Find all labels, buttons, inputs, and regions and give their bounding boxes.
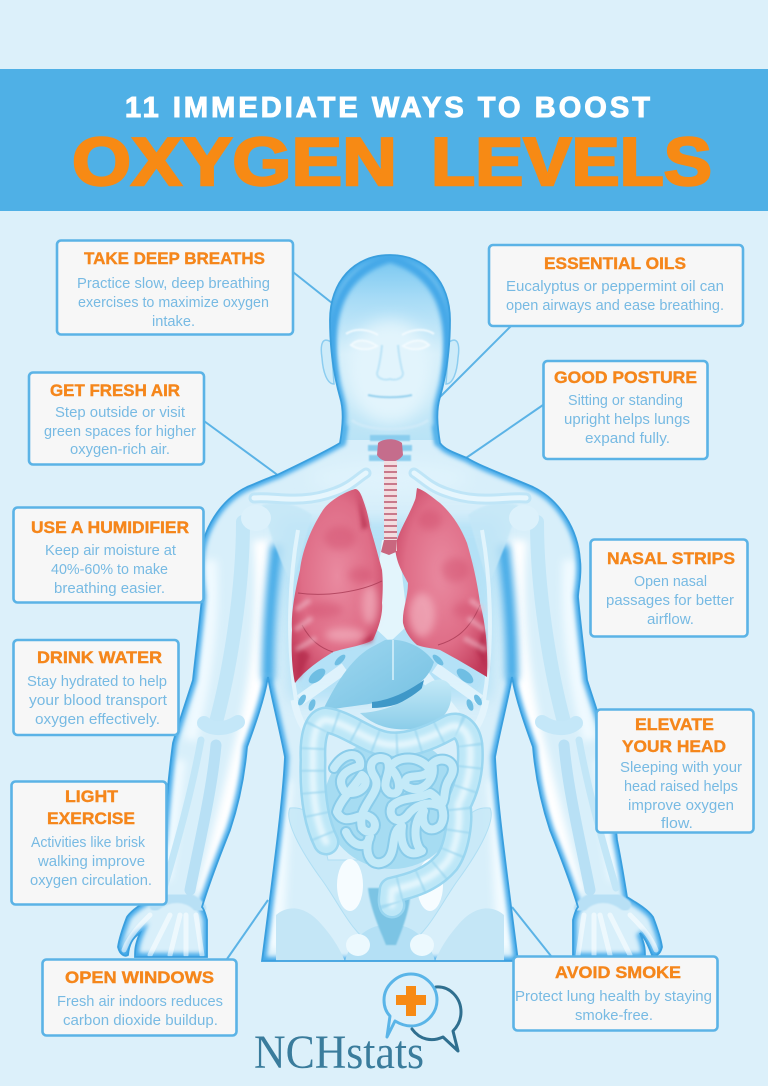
body text	[77, 276, 270, 330]
heading: AVOID SMOKE	[555, 964, 681, 982]
neck shade	[342, 425, 438, 445]
body text: carbon dioxide buildup.	[63, 1013, 218, 1029]
logo: NCHstats	[254, 974, 461, 1079]
anatomical body figure	[118, 250, 662, 961]
body text: Activities like brisk	[31, 835, 146, 851]
lung fissures	[298, 581, 480, 652]
body text: exercises to maximize oxygen	[78, 295, 269, 311]
right lung	[395, 488, 487, 677]
panel: open windows	[42, 960, 236, 1036]
panel: use a humidifier	[14, 508, 204, 602]
body text: open airways and ease breathing.	[506, 298, 724, 314]
title line 2: OXYGEN	[72, 125, 397, 200]
ribcage	[290, 530, 490, 745]
heading: NASAL STRIPS	[607, 550, 735, 568]
heading	[622, 716, 726, 756]
body text: your blood transport	[29, 693, 167, 709]
banner band	[0, 69, 768, 211]
body text: passages for better	[606, 593, 734, 609]
rib holes	[296, 653, 484, 712]
body text: upright helps lungs	[564, 412, 690, 428]
body text: oxygen circulation.	[30, 873, 152, 889]
left lung	[292, 489, 383, 683]
shoulder blades	[262, 503, 518, 585]
rib overlay	[295, 600, 486, 650]
body text: Protect lung health by staying	[515, 989, 712, 1005]
panel: avoid smoke	[514, 956, 718, 1030]
heading: USE A HUMIDIFIER	[31, 519, 189, 537]
panel: drink water	[14, 640, 178, 735]
body text: breathing easier.	[54, 581, 165, 597]
title line 2: LEVELS	[431, 125, 712, 200]
title banner	[0, 69, 768, 211]
body text: head raised helps	[624, 779, 738, 795]
torso chest shade	[280, 520, 500, 700]
falciform line	[392, 640, 394, 680]
body text: flow.	[661, 816, 693, 832]
body text: Eucalyptus or peppermint oil can	[506, 279, 724, 295]
ears	[321, 340, 459, 384]
head side shade	[332, 258, 448, 380]
body text: Stay hydrated to help	[27, 674, 167, 690]
rectum	[368, 888, 410, 945]
panel: get fresh air	[29, 372, 204, 464]
body text: Keep air moisture at	[45, 543, 176, 559]
heading: YOUR HEAD	[622, 738, 726, 756]
heading: ESSENTIAL OILS	[544, 255, 686, 273]
body text: oxygen effectively.	[35, 712, 160, 728]
lungs	[292, 488, 487, 683]
body text	[30, 835, 152, 889]
pelvis	[276, 808, 504, 961]
heading: DRINK WATER	[37, 649, 162, 667]
neck vertebrae	[368, 438, 412, 458]
trachea	[381, 461, 397, 555]
body text	[564, 393, 690, 447]
panel: nasal strips	[590, 540, 748, 636]
heading: GET FRESH AIR	[50, 382, 180, 400]
body text	[57, 994, 223, 1029]
body silhouette	[118, 255, 662, 961]
panel: take deep breaths	[57, 240, 293, 334]
body text	[44, 405, 196, 458]
heading: ELEVATE	[635, 716, 714, 734]
body text: Practice slow, deep breathing	[77, 276, 270, 292]
body text	[620, 760, 742, 832]
panel: good posture	[544, 361, 708, 459]
collar bones and shoulders	[254, 473, 526, 499]
body text	[515, 989, 712, 1024]
body text	[506, 279, 724, 314]
heading: TAKE DEEP BREATHS	[84, 250, 265, 268]
stomach	[360, 680, 451, 729]
larynx	[377, 439, 403, 462]
body text: 40%-60% to make	[51, 562, 168, 578]
small intestine	[334, 755, 453, 863]
arm highlights	[205, 540, 264, 895]
icon: orange plus	[396, 986, 426, 1016]
heading: EXERCISE	[47, 810, 135, 828]
heading: OPEN WINDOWS	[65, 969, 214, 987]
edge glow	[118, 255, 662, 961]
sternum	[372, 540, 408, 642]
body text: Sleeping with your	[620, 760, 742, 776]
panel: elevate your head	[596, 710, 754, 832]
body text: Fresh air indoors reduces	[57, 994, 223, 1010]
heading: GOOD POSTURE	[554, 369, 697, 387]
logo wordmark: NCHstats	[254, 1026, 424, 1079]
body text	[45, 543, 176, 597]
icon: light speech bubble	[384, 974, 437, 1037]
hand bones	[124, 915, 202, 955]
body outline	[118, 255, 662, 961]
heading: LIGHT	[65, 788, 118, 806]
intestine backing	[324, 737, 460, 869]
body text: airflow.	[647, 612, 694, 628]
body text: expand fully.	[585, 431, 670, 447]
body text: Step outside or visit	[55, 405, 185, 421]
panel: light exercise	[12, 782, 166, 904]
lung mottling	[307, 510, 477, 618]
lung dark tips	[296, 494, 487, 680]
body text: smoke-free.	[575, 1008, 653, 1024]
body text: oxygen-rich air.	[70, 442, 170, 458]
body text: Sitting or standing	[568, 393, 683, 409]
body text	[606, 574, 734, 628]
body text: improve oxygen	[628, 798, 734, 814]
icon: dark speech bubble	[412, 987, 461, 1051]
body text: walking improve	[37, 854, 145, 870]
diaphragm shadow under liver	[372, 680, 424, 708]
face features	[346, 330, 434, 429]
connector lines	[204, 272, 551, 959]
title line 1: 11 IMMEDIATE WAYS TO BOOST	[125, 92, 650, 124]
body text	[27, 674, 167, 728]
arm bones	[124, 505, 656, 955]
panel: essential oils	[489, 245, 743, 326]
body text: Open nasal	[634, 574, 707, 590]
large intestine	[313, 720, 470, 905]
body text: green spaces for higher	[44, 424, 196, 440]
heading	[47, 788, 135, 828]
inner shading of body	[118, 250, 662, 961]
body text: intake.	[152, 314, 195, 330]
lung highlights	[325, 585, 435, 642]
title line 2	[72, 125, 712, 200]
armpit shadow	[268, 545, 512, 680]
liver	[322, 640, 434, 712]
